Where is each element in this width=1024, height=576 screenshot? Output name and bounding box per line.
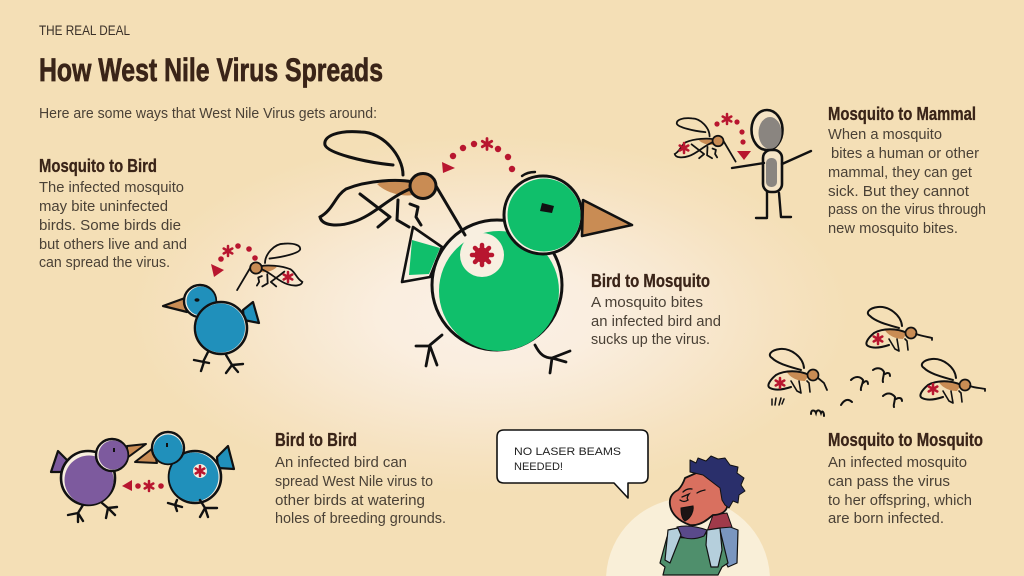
text block: mosquito to mammal: When a mosquito xyxy=(828,126,942,143)
title: How West Nile Virus Spreads xyxy=(39,52,383,88)
text block: bird to mosquito xyxy=(591,271,721,348)
text block: mosquito to mammal: sick. But they cannot xyxy=(828,183,970,200)
illustration: bird to bird xyxy=(51,432,234,522)
text block: mosquito to bird: can spread the virus. xyxy=(39,254,170,271)
text block: bird to bird: Bird to Bird xyxy=(275,430,357,450)
text block: bird to mosquito: sucks up the virus. xyxy=(591,331,710,348)
text block: bird to bird xyxy=(275,430,446,527)
text block: bird to bird: holes of breeding grounds. xyxy=(275,510,446,527)
text block: mosquito to bird: The infected mosquito xyxy=(39,179,184,196)
text block: mosquito to mosquito: to her offspring, which xyxy=(828,492,972,509)
text block: mosquito to bird: may bite uninfected xyxy=(39,198,168,215)
speech bubble: NO LASER BEAMS xyxy=(514,446,621,458)
speech bubble xyxy=(497,430,648,498)
illustration: boy with backpack xyxy=(606,456,770,576)
text block: mosquito to mosquito xyxy=(828,430,983,527)
text block: mosquito to mammal xyxy=(828,104,986,237)
intro text: Here are some ways that West Nile Virus gets around: xyxy=(39,105,377,122)
virus transfer arc xyxy=(442,138,515,173)
text block: mosquito to mammal: new mosquito bites. xyxy=(828,220,958,237)
text block: mosquito to bird: but others live and and xyxy=(39,236,187,253)
text block: bird to mosquito: A mosquito bites xyxy=(591,294,703,311)
illustration: infected mosquitoes and larvae xyxy=(768,307,985,416)
mosquito xyxy=(320,132,465,235)
infected spot xyxy=(460,233,504,277)
illustration: mosquito biting blue bird xyxy=(163,243,302,373)
text block: mosquito to mammal: pass on the virus through xyxy=(828,201,986,218)
text block: mosquito to bird xyxy=(39,156,187,271)
text block: mosquito to mammal: Mosquito to Mammal xyxy=(828,104,976,124)
text block: mosquito to mosquito: Mosquito to Mosquito xyxy=(828,430,983,450)
text block: mosquito to mammal: mammal, they can get xyxy=(828,164,973,181)
text block: bird to bird: spread West Nile virus to xyxy=(275,473,433,490)
text block: bird to bird: other birds at watering xyxy=(275,492,425,509)
text block: bird to mosquito: an infected bird and xyxy=(591,313,721,330)
text block: mosquito to mosquito: are born infected. xyxy=(828,510,944,527)
text block: mosquito to mosquito: can pass the virus xyxy=(828,473,950,490)
legs xyxy=(416,335,570,373)
text block: mosquito to mammal: bites a human or other xyxy=(831,145,979,162)
text block: mosquito to bird: birds. Some birds die xyxy=(39,217,181,234)
body xyxy=(432,220,562,350)
eyebrow: the real deal: THE REAL DEAL xyxy=(39,23,130,38)
head xyxy=(504,176,582,254)
speech bubble: NEEDED! xyxy=(514,461,563,473)
illustration: big bird with mosquito xyxy=(320,132,632,373)
tail xyxy=(402,227,442,282)
text block: bird to mosquito: Bird to Mosquito xyxy=(591,271,710,291)
text block: mosquito to bird: Mosquito to Bird xyxy=(39,156,157,176)
text block: mosquito to mosquito: An infected mosquito xyxy=(828,454,967,471)
text block: bird to bird: An infected bird can xyxy=(275,454,407,471)
illustration: mosquito biting mammal xyxy=(675,110,811,218)
beak xyxy=(582,200,632,236)
